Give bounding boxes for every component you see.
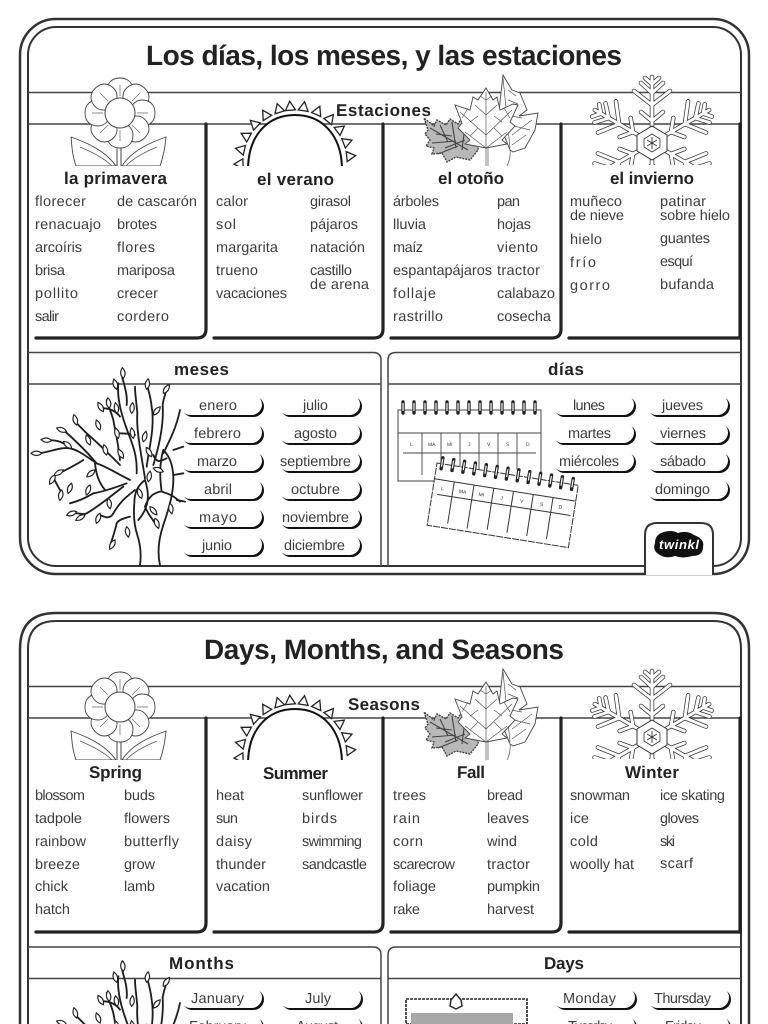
icon: snowflake <box>586 671 718 803</box>
panel: Fall: foliage <box>393 879 436 895</box>
panel: días: martes <box>568 426 611 442</box>
panel: Spring: buds <box>124 788 155 804</box>
panel: meses: febrero <box>194 426 241 442</box>
panel: la primavera: crecer <box>117 286 158 302</box>
panel: el otoño: tractor <box>497 263 540 279</box>
panel: Winter: ice <box>570 811 589 827</box>
panel: Days: Thursday <box>654 991 712 1007</box>
panel: Spring <box>35 672 206 932</box>
panel: Summer: Summer <box>263 764 328 783</box>
panel: el otoño: hojas <box>497 217 531 233</box>
icon: snowflake <box>586 77 718 209</box>
panel: Summer: thunder <box>216 857 266 873</box>
panel: Days <box>388 947 741 1024</box>
panel: el otoño: espantapájaros <box>393 263 492 279</box>
panel: meses: agosto <box>294 426 337 442</box>
panel: meses: meses <box>174 360 229 379</box>
panel: Fall: rake <box>393 902 420 918</box>
panel: la primavera: renacuajo <box>35 217 101 233</box>
panel: Summer: sandcastle <box>302 857 367 873</box>
panel: Fall <box>391 669 561 932</box>
icon: tilted calendar <box>427 457 579 548</box>
panel: Spring: lamb <box>124 879 155 895</box>
panel: Fall: scarecrow <box>393 857 456 873</box>
panel: la primavera: la primavera <box>64 169 168 188</box>
panel: el otoño: pan <box>497 194 520 210</box>
panel: el otoño: follaje <box>393 286 436 302</box>
panel: Fall: trees <box>393 788 426 804</box>
panel: Spring: breeze <box>35 857 80 873</box>
panel: Spring: grow <box>124 857 156 873</box>
panel: el invierno: frío <box>570 255 596 271</box>
panel: Winter: ski <box>660 834 675 850</box>
panel: el verano: de arena <box>310 277 370 293</box>
panel: el verano: trueno <box>216 263 258 279</box>
panel: Months <box>28 947 381 1024</box>
panel: Days: Days <box>544 954 584 973</box>
panel: Summer: swimming <box>302 834 362 850</box>
icon: autumn leaves <box>424 669 538 760</box>
panel: el verano: castillo <box>310 263 352 279</box>
panel: el otoño: viento <box>497 240 538 256</box>
logo badge: twinkl <box>645 523 713 575</box>
panel: Spring: hatch <box>35 902 70 918</box>
panel: Winter: scarf <box>660 856 694 872</box>
logo badge: twinkl: twinkl <box>659 537 699 552</box>
panel: Winter: snowman <box>570 788 630 804</box>
panel: Spring: rainbow <box>35 834 87 850</box>
panel: el verano: vacaciones <box>216 286 287 302</box>
panel: Fall: tractor <box>487 857 530 873</box>
panel: el verano: natación <box>310 240 365 256</box>
panel: la primavera: brotes <box>117 217 157 233</box>
panel: el verano: girasol <box>310 194 351 210</box>
seasons header band: Spanish: Estaciones <box>336 101 431 120</box>
seasons header band: English <box>28 686 741 718</box>
panel: días: jueves <box>661 398 703 414</box>
icon: wall calendar: D <box>526 442 530 448</box>
panel: la primavera: arcoíris <box>35 240 82 256</box>
panel: Winter: cold <box>570 834 598 850</box>
icon: flower <box>71 78 166 166</box>
panel: Summer: birds <box>302 811 337 827</box>
panel: el verano: sol <box>216 217 236 233</box>
icon: wall calendar: L <box>410 442 413 448</box>
panel: Winter: gloves <box>660 811 699 827</box>
panel: Months: Months <box>169 954 234 973</box>
panel: el otoño: árboles <box>393 194 439 210</box>
panel: Fall: corn <box>393 834 423 850</box>
icon: tilted calendar: S <box>539 502 544 508</box>
panel: días: días <box>548 360 584 379</box>
panel: días: miércoles <box>559 454 619 470</box>
icon: tilted calendar: V <box>520 498 524 505</box>
panel: el invierno: esquí <box>660 254 693 270</box>
panel: el otoño: el otoño <box>438 169 504 188</box>
panel: el invierno: el invierno <box>610 169 694 188</box>
panel: Summer <box>214 695 383 932</box>
panel: la primavera: mariposa <box>117 263 176 279</box>
panel: el otoño <box>391 75 561 338</box>
icon: tilted calendar: MI <box>478 492 484 499</box>
panel: la primavera: brisa <box>35 263 66 279</box>
panel: la primavera: salir <box>35 309 59 325</box>
panel: Summer: vacation <box>216 879 270 895</box>
panel: la primavera: flores <box>117 240 155 256</box>
panel: el otoño: maíz <box>393 240 423 256</box>
icon: wall calendar: S <box>506 442 510 448</box>
icon: flower <box>71 672 166 760</box>
panel: el otoño: calabazo <box>497 286 555 302</box>
icon: tilted calendar: D <box>558 505 563 511</box>
panel: Fall: harvest <box>487 902 534 918</box>
panel: Winter: woolly hat <box>569 857 634 873</box>
panel: meses: enero <box>199 398 237 414</box>
panel: el invierno: patinar <box>660 194 706 210</box>
panel: el verano: el verano <box>257 170 334 189</box>
panel: Spring: butterfly <box>124 834 180 850</box>
panel: el invierno: gorro <box>570 278 610 294</box>
panel: Summer: daisy <box>216 834 253 850</box>
panel: Spring: blossom <box>35 788 85 804</box>
panel: días: lunes <box>573 398 605 414</box>
panel: el invierno: de nieve <box>570 208 624 224</box>
panel: Spring: Spring <box>89 763 142 782</box>
icon: autumn leaves <box>424 75 538 166</box>
panel: meses: julio <box>302 398 328 414</box>
panel: el invierno: bufanda <box>660 277 715 293</box>
panel: Summer: sun <box>216 811 238 827</box>
panel: Spring: tadpole <box>35 811 82 827</box>
icon: tree <box>31 368 185 565</box>
icon: wall calendar: V <box>487 442 491 448</box>
icon: tree <box>31 961 185 1024</box>
panel: meses: noviembre <box>282 510 349 526</box>
icon: tilted calendar: J <box>500 495 504 502</box>
panel: Days: Monday <box>563 991 617 1007</box>
frame: English sheet <box>20 613 749 1024</box>
panel: el invierno: muñeco <box>570 194 622 210</box>
panel: Winter: Winter <box>625 763 679 782</box>
panel: Fall: Fall <box>457 763 485 782</box>
panel: Fall: wind <box>486 834 517 850</box>
seasons header band: Spanish <box>28 92 741 124</box>
panel: meses: junio <box>201 538 232 554</box>
panel: la primavera: florecer <box>35 194 86 210</box>
panel: Fall: pumpkin <box>487 879 540 895</box>
icon: tilted calendar: MA <box>458 489 467 496</box>
panel: el verano: pájaros <box>310 217 358 233</box>
title: Spanish: Los días, los meses, y las estaciones <box>146 40 622 71</box>
panel: el invierno: sobre hielo <box>660 208 730 224</box>
panel: meses: diciembre <box>284 538 345 554</box>
frame: Spanish sheet <box>20 19 749 574</box>
panel: días: domingo <box>655 482 710 498</box>
panel: meses: mayo <box>199 510 237 526</box>
panel: Spring: flowers <box>124 811 170 827</box>
panel: el invierno: guantes <box>660 231 710 247</box>
panel: Fall: bread <box>487 788 523 804</box>
panel: Winter: ice skating <box>660 788 725 804</box>
panel: el otoño: cosecha <box>497 309 552 325</box>
panel: días <box>388 352 741 566</box>
title: English: Days, Months, and Seasons <box>204 634 564 665</box>
icon: wall calendar: MA <box>428 442 436 448</box>
panel: días: viernes <box>660 426 706 442</box>
icon: wall calendar: J <box>468 442 471 448</box>
seasons header band: English: Seasons <box>348 695 420 714</box>
panel: Fall: leaves <box>487 811 529 827</box>
panel: el invierno <box>569 77 740 338</box>
panel: el verano: margarita <box>216 240 279 256</box>
panel: Summer: heat <box>216 788 244 804</box>
panel: el verano: calor <box>216 194 248 210</box>
icon: wall calendar: MI <box>447 442 453 448</box>
panel: meses <box>28 352 381 566</box>
icon: tilted calendar: L <box>441 486 444 492</box>
panel: meses: octubre <box>291 482 340 498</box>
panel: el verano <box>214 101 383 338</box>
panel: Spring: chick <box>35 879 69 895</box>
panel: días: sábado <box>660 454 706 470</box>
panel: el invierno: hielo <box>570 232 602 248</box>
panel: Fall: rain <box>393 811 420 827</box>
panel: meses: marzo <box>197 454 237 470</box>
panel: meses: septiembre <box>280 454 351 470</box>
icon: wall calendar <box>398 402 541 481</box>
panel: Months: January <box>191 991 245 1007</box>
icon: hanging calendar <box>406 994 527 1024</box>
panel: el otoño: lluvia <box>393 217 427 233</box>
panel: Months: July <box>305 991 332 1007</box>
panel: Winter <box>569 671 740 932</box>
panel: la primavera: pollito <box>35 286 78 302</box>
panel: meses: abril <box>204 482 232 498</box>
panel: la primavera: cordero <box>117 309 169 325</box>
panel: la primavera: de cascarón <box>117 194 197 210</box>
panel: el otoño: rastrillo <box>393 309 443 325</box>
panel: la primavera <box>35 78 206 338</box>
panel: Summer: sunflower <box>302 788 363 804</box>
icon: sun <box>234 695 356 764</box>
icon: sun <box>234 101 356 170</box>
